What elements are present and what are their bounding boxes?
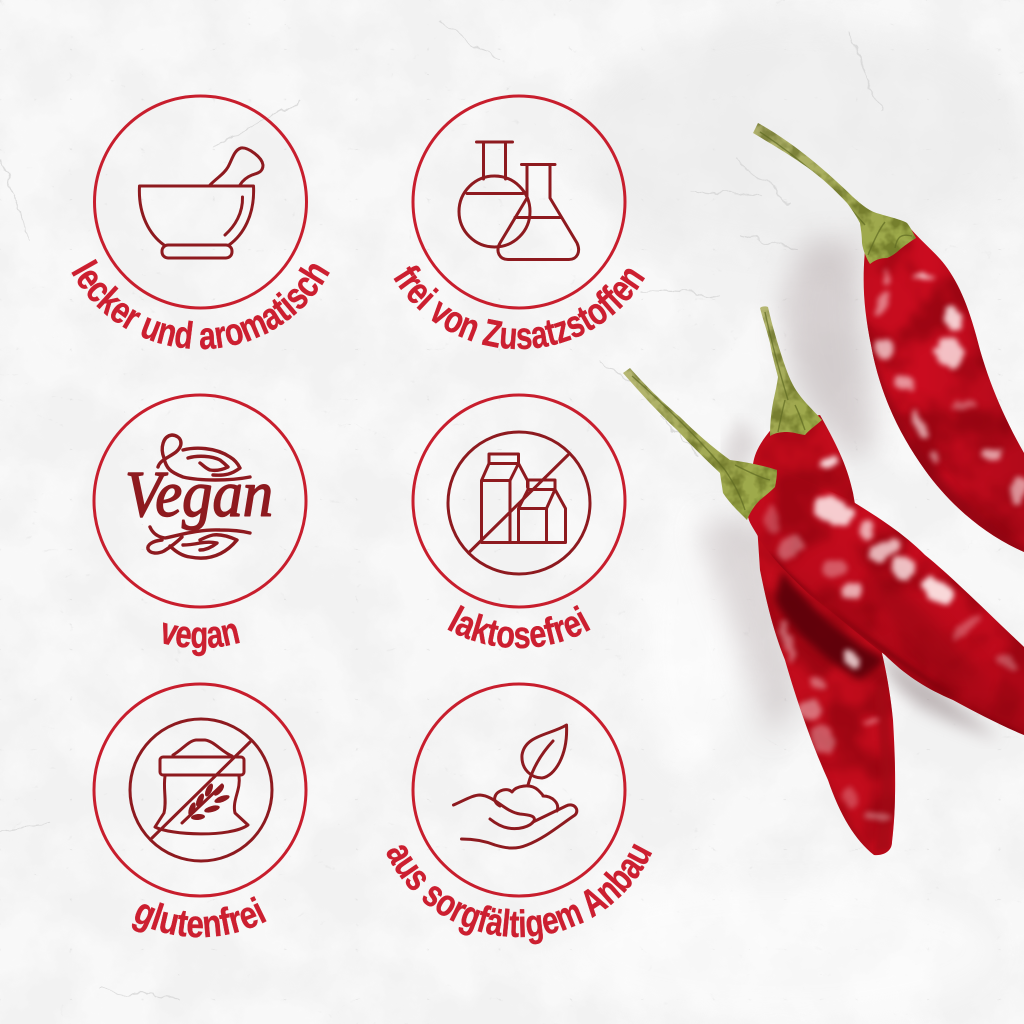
badge ring — [413, 96, 625, 308]
pepper stem — [760, 306, 822, 436]
chili: right upper pepper — [745, 118, 1024, 560]
label: glutenfrei — [132, 896, 266, 938]
pepper stem — [753, 123, 916, 264]
badge: vegan — [92, 394, 308, 656]
upper leaf flourish — [158, 435, 250, 480]
badge ring — [94, 395, 306, 607]
lower leaf flourish — [148, 527, 250, 558]
pepper body — [748, 491, 1024, 735]
label: aus sorgfältigem Anbau — [386, 844, 652, 944]
label: frei von Zusatzstoffen — [394, 266, 645, 350]
badge: laktosefrei — [412, 394, 626, 648]
badge ring — [94, 96, 306, 308]
chili: back pepper — [753, 306, 896, 856]
badge ring — [94, 684, 306, 896]
icon: vegan lettering with leaves — [125, 435, 273, 558]
pepper body — [753, 415, 896, 856]
pepper body — [864, 228, 1024, 552]
script word: Vegan — [125, 458, 273, 531]
label: lecker und aromatisch — [71, 258, 330, 350]
icon: mortar and pestle — [139, 148, 263, 258]
badge: glutenfrei — [92, 682, 308, 938]
icon: crossed out flour sack — [130, 719, 272, 861]
icon: hand holding seedling — [454, 725, 577, 848]
pepper stem — [623, 368, 777, 520]
badge: lecker und aromatisch — [71, 94, 330, 350]
label: vegan — [163, 622, 240, 656]
chili shadows — [700, 240, 1000, 740]
badge: frei von Zusatzstoffen — [394, 94, 645, 350]
icon: crossed out milk cartons — [448, 432, 590, 574]
badge: aus sorgfaeltigem Anbau — [386, 682, 652, 944]
icon: laboratory flasks — [459, 142, 579, 260]
label: laktosefrei — [448, 604, 590, 648]
badge ring — [413, 395, 625, 607]
badge ring — [413, 684, 625, 896]
chili: front pepper — [615, 360, 1024, 750]
